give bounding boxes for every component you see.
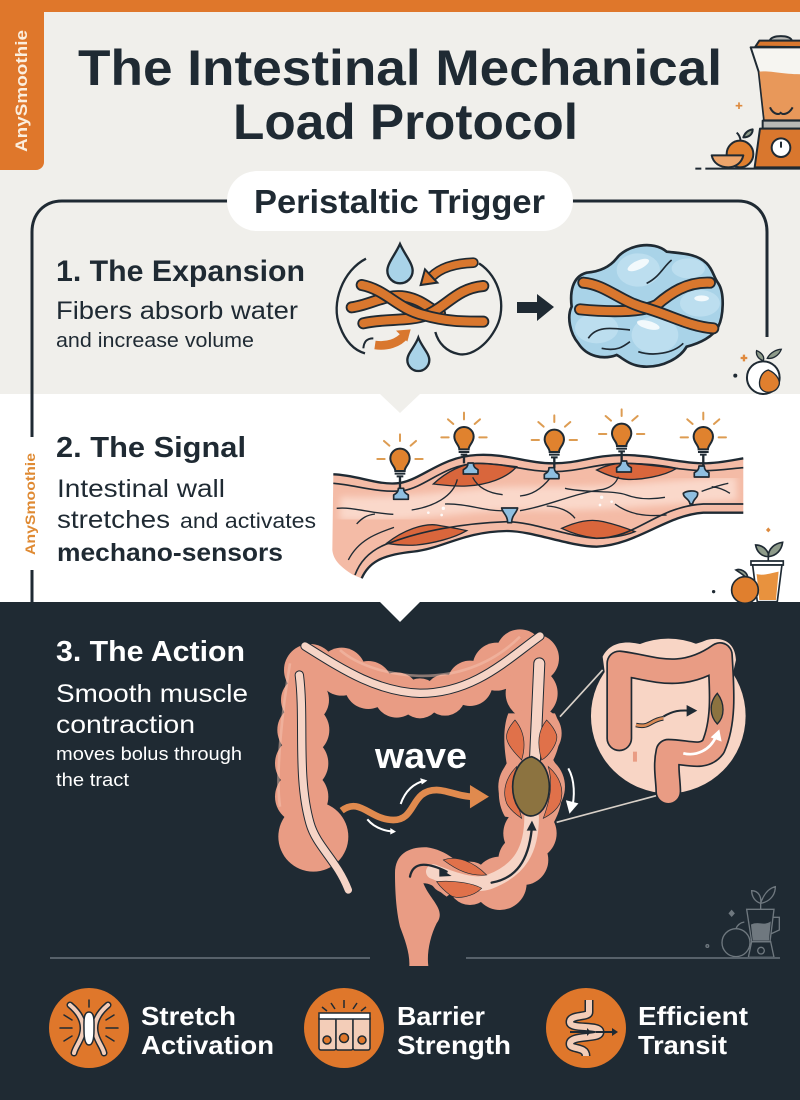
label: stretch activation: Stretch bbox=[141, 1001, 236, 1031]
nerve fibres bbox=[337, 477, 730, 560]
top orange bar bbox=[0, 0, 800, 12]
benefit: barrier strength bbox=[304, 988, 384, 1068]
label: barrier strength bbox=[397, 1001, 511, 1060]
panel: the action text: moves bolus through bbox=[56, 743, 242, 764]
label: efficient transit: Transit bbox=[638, 1030, 727, 1060]
label: stretch activation: Activation bbox=[141, 1030, 274, 1060]
vertical brand label: AnySmoothie bbox=[22, 453, 38, 555]
panel: the signal text bbox=[56, 432, 316, 567]
icon: blender watermark bbox=[700, 887, 780, 958]
title: Load Protocol bbox=[233, 94, 578, 150]
arrow: expansion bbox=[517, 294, 554, 321]
notch: expansion to signal bbox=[380, 394, 420, 413]
illustration: intestinal wall with mechano-sensors bbox=[332, 409, 743, 578]
callout: colon inset bbox=[557, 639, 746, 822]
panel: the signal text: and activates bbox=[180, 510, 316, 533]
panel: the expansion text: 1. The Expansion bbox=[56, 255, 305, 288]
pill heading bbox=[227, 171, 573, 231]
label: barrier strength: Strength bbox=[397, 1030, 511, 1060]
panel: the expansion text: and increase volume bbox=[56, 330, 254, 352]
pill heading: Peristaltic Trigger bbox=[254, 183, 545, 220]
panel: the action text: Smooth muscle bbox=[56, 680, 248, 708]
title bbox=[78, 40, 722, 150]
panel: the action text: the tract bbox=[56, 769, 129, 790]
icon: intestine bbox=[570, 1000, 618, 1056]
illustration: fibers and water bbox=[337, 244, 501, 371]
panel: the expansion text: Fibers absorb water bbox=[56, 297, 298, 325]
white motion arrows bbox=[367, 768, 577, 834]
icon: apple and juice glass bbox=[712, 527, 783, 603]
inner highlights bbox=[278, 637, 520, 807]
icon: stretch bbox=[60, 1000, 118, 1053]
muscle contractions bbox=[437, 720, 562, 897]
sensors and bulbs bbox=[377, 409, 726, 523]
bolus bbox=[513, 757, 549, 816]
panel: the action text bbox=[56, 636, 248, 790]
illustration: colon bbox=[275, 629, 577, 966]
arrow: peristaltic flow bbox=[342, 785, 489, 820]
colon body bbox=[275, 629, 565, 966]
title: The Intestinal Mechanical bbox=[78, 40, 722, 96]
label: barrier strength: Barrier bbox=[397, 1001, 485, 1031]
panel: the expansion text bbox=[56, 255, 305, 352]
panel: the signal text: 2. The Signal bbox=[56, 432, 246, 464]
benefit: stretch activation bbox=[49, 988, 129, 1068]
panel: the signal text: Intestinal wall bbox=[57, 475, 225, 503]
frame line bbox=[32, 201, 767, 602]
panel: the action text: contraction bbox=[56, 711, 195, 739]
divider right bbox=[466, 957, 780, 959]
icon: blender with fruit bbox=[695, 36, 800, 169]
inner tube bbox=[299, 636, 540, 890]
benefit: efficient transit bbox=[546, 988, 626, 1068]
panel: the signal text: stretches bbox=[57, 506, 170, 534]
panel: the signal text: mechano-sensors bbox=[57, 539, 283, 567]
background: action section bbox=[0, 602, 800, 1100]
panel: the action text: 3. The Action bbox=[56, 636, 245, 668]
label: efficient transit bbox=[638, 1001, 748, 1060]
background: top section bbox=[0, 0, 800, 394]
background: signal section bbox=[0, 394, 800, 602]
icon: peach bbox=[733, 349, 781, 394]
illustration: swollen fiber gel bbox=[569, 245, 723, 367]
sparkles bbox=[427, 496, 613, 516]
label: efficient transit: Efficient bbox=[638, 1001, 748, 1031]
notch: signal to action bbox=[380, 602, 420, 622]
icon: cells bbox=[319, 1000, 370, 1050]
brand tab bbox=[0, 0, 44, 170]
muscle bundles bbox=[387, 463, 677, 545]
divider left bbox=[50, 957, 370, 959]
wave label: wave bbox=[374, 735, 467, 776]
label: stretch activation bbox=[141, 1001, 274, 1060]
brand tab: AnySmoothie bbox=[12, 30, 31, 152]
